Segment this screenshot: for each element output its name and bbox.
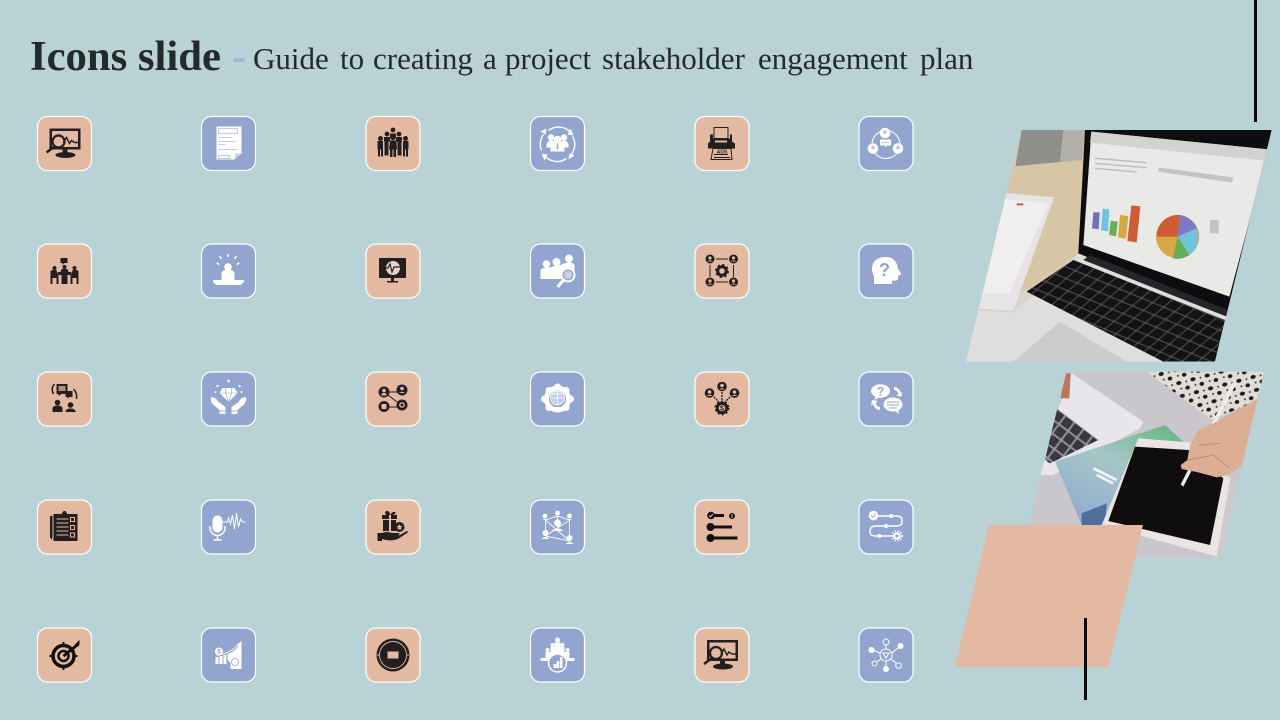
title: - (232, 33, 246, 80)
vertical line top right (1254, 0, 1257, 122)
icon tile: microphone with waveform (202, 500, 256, 554)
icon tile: hub and spoke network (859, 628, 913, 682)
title: Guide (253, 41, 329, 76)
icon tile: group of people (366, 116, 420, 170)
icon tile: three-person communication loop (859, 116, 913, 170)
icon tile: fax machine (695, 116, 749, 170)
icon tile: hands holding diamond (202, 372, 256, 426)
icon tile: discussion between two people (38, 372, 92, 426)
icon tile: networked people (530, 500, 584, 554)
icon tile: team with chart circle (530, 628, 584, 682)
title: engagement (758, 41, 908, 76)
title: creating (373, 41, 473, 76)
icon tile: target with dart (38, 628, 92, 682)
icon tile: fax machine: ADS (717, 150, 728, 156)
icon tile: gear linked to three people (695, 372, 749, 426)
vertical line bottom (1084, 618, 1087, 700)
photo detail: hand and stylus (1181, 382, 1265, 487)
photo: tablet and stylus (1028, 372, 1264, 558)
icon tile: growth chart with money: $ (217, 650, 221, 656)
icon tile: gear linked to three people: $ (720, 406, 724, 412)
icon tile: cycle around team (530, 116, 584, 170)
title: project (505, 41, 591, 76)
icon tile: question and answer bubbles: ? (877, 384, 884, 398)
photo detail: dotted blouse (1147, 372, 1265, 420)
icon tile: team under magnifier (530, 244, 584, 298)
icon tile: document (202, 116, 256, 170)
icon tile: head with question mark (859, 244, 913, 298)
icon tile: question and answer bubbles (859, 372, 913, 426)
icon tile: gear with light bulb (530, 372, 584, 426)
icon tile: growth chart with money (202, 628, 256, 682)
title: a (483, 41, 497, 76)
icon tile: monitor with magnifier (repeat) (695, 628, 749, 682)
icon tile: head with question mark: ? (879, 260, 890, 280)
icon tile: checklist bars (695, 500, 749, 554)
title: to (340, 41, 364, 76)
icon tile: gear with four people (695, 244, 749, 298)
icon tile: monitor with magnifier (38, 116, 92, 170)
photo: laptop with charts (966, 130, 1272, 362)
icon tile: connected circle nodes (366, 372, 420, 426)
title: plan (920, 41, 974, 76)
icon tile: hand holding gift (366, 500, 420, 554)
icon tile: person with alert podium (202, 244, 256, 298)
title: stakeholder (602, 41, 746, 76)
icon tile: process path with gear (859, 500, 913, 554)
icon tile: monitor with heartbeat (366, 244, 420, 298)
peach parallelogram (955, 525, 1143, 667)
photo detail: tablet (977, 193, 1054, 311)
icon tile: meeting table (38, 244, 92, 298)
icon tile: clipboard checklist (38, 500, 92, 554)
icon tile: round dial (366, 628, 420, 682)
title: Icons slide (30, 33, 221, 80)
